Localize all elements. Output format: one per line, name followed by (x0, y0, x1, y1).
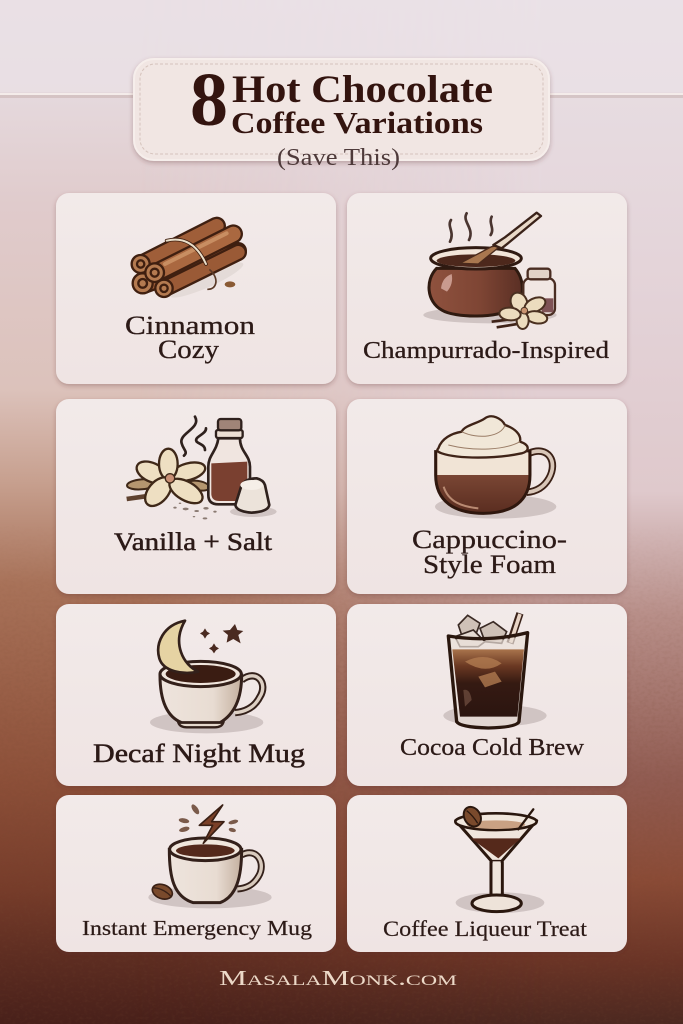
label: Vanilla + Salt: Vanilla + Salt (114, 529, 272, 556)
panel: instant emergency mug (56, 795, 336, 952)
panel: decaf night mug (56, 604, 336, 786)
label: Cinnamon Cozy: Cinnamon (125, 311, 255, 340)
label: Cinnamon Cozy: Cozy (158, 335, 219, 364)
title line 2: Coffee Variations (231, 105, 483, 140)
panel: coffee liqueur treat (347, 795, 627, 952)
icon: cappuccino cup (435, 416, 556, 519)
panel: champurrado-inspired (347, 193, 627, 384)
footer: website: MasalaMonk.com (219, 966, 457, 990)
title line 1: Hot Chocolate (232, 68, 493, 111)
label: Cocoa Cold Brew: Cocoa Cold Brew (400, 735, 585, 761)
label: Coffee Liqueur Treat: Coffee Liqueur Treat (383, 916, 587, 941)
panel: cocoa cold brew (347, 604, 627, 786)
label: Decaf Night Mug: Decaf Night Mug (93, 739, 305, 768)
icon: moon, stars and mug (150, 621, 263, 733)
panel: cinnamon cozy (56, 193, 336, 384)
label: Cinnamon Cozy (125, 311, 255, 364)
title banner (134, 58, 549, 160)
label: Cappuccino-Style Foam: Cappuccino- (412, 525, 567, 554)
subtitle: (Save This) (277, 145, 400, 171)
title number: 8 (190, 58, 228, 142)
panel: cappuccino-style foam (347, 399, 627, 594)
icon: martini glass (455, 804, 544, 913)
panel: vanilla + salt (56, 399, 336, 594)
icon: iced glass (443, 613, 547, 728)
label: Cappuccino-Style Foam (412, 525, 567, 579)
label: Instant Emergency Mug: Instant Emergency Mug (82, 916, 313, 940)
icon: cinnamon sticks (132, 226, 246, 303)
label: Cappuccino-Style Foam: Style Foam (423, 550, 556, 579)
icon: vanilla flower, bottle and salt (127, 417, 277, 519)
icon: clay pot with whisk (423, 213, 557, 329)
label: Champurrado-Inspired: Champurrado-Inspired (363, 338, 609, 364)
icon: mug with lightning bolt and bean (148, 803, 272, 908)
